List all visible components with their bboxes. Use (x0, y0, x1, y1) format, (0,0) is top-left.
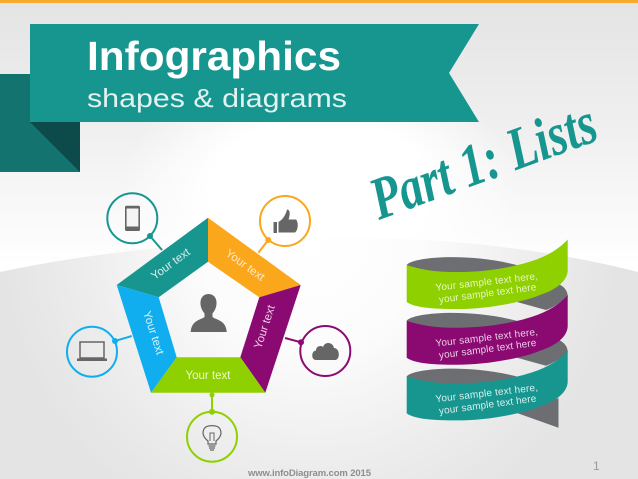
ribbon: purple (407, 295, 568, 365)
pentagon diagram (117, 218, 301, 393)
banner ribbon (30, 24, 479, 122)
top accent bar (0, 0, 638, 3)
segment: orange (208, 218, 301, 297)
ribbon: purple: your sample text here (438, 338, 537, 362)
banner fold (0, 74, 80, 172)
segment: green (151, 357, 265, 393)
ribbon: green: your sample text here (438, 282, 537, 306)
footer source: www.infoDiagram.com 2015 (247, 468, 372, 479)
icon: light bulb (203, 426, 221, 450)
subtitle: shapes & diagrams (87, 83, 347, 113)
segment: green: Your text (186, 370, 231, 382)
node: phone (107, 193, 162, 250)
ribbon: purple: Your sample text here, (435, 327, 539, 350)
segment: blue: Your text (140, 310, 166, 357)
title: Infographics (87, 33, 341, 79)
icon: cloud (312, 343, 339, 360)
ribbon list (407, 240, 568, 428)
segment: blue (117, 285, 177, 393)
icon: thumbs up (274, 210, 298, 233)
node: light bulb (187, 392, 237, 462)
ribbon: green (407, 240, 568, 309)
segment: teal: Your text (149, 246, 193, 283)
segment: purple: Your text (252, 303, 278, 350)
ribbon: teal (407, 351, 568, 420)
segment: purple (240, 285, 301, 393)
icon: laptop (77, 342, 107, 361)
node: laptop (67, 327, 132, 377)
ribbon: green: Your sample text here, (435, 271, 539, 294)
icon: person (191, 294, 227, 332)
node: cloud (285, 326, 350, 376)
ribbon: teal: Your sample text here, (435, 383, 539, 405)
ribbon: teal: your sample text here (438, 394, 537, 417)
segment: orange: Your text (223, 248, 267, 284)
node: thumbs up (258, 196, 310, 253)
page number: 1 (593, 459, 600, 473)
title banner (0, 24, 479, 172)
icon: phone (125, 206, 140, 231)
segment: teal (117, 218, 208, 297)
ribbon shadow folds (407, 257, 568, 428)
